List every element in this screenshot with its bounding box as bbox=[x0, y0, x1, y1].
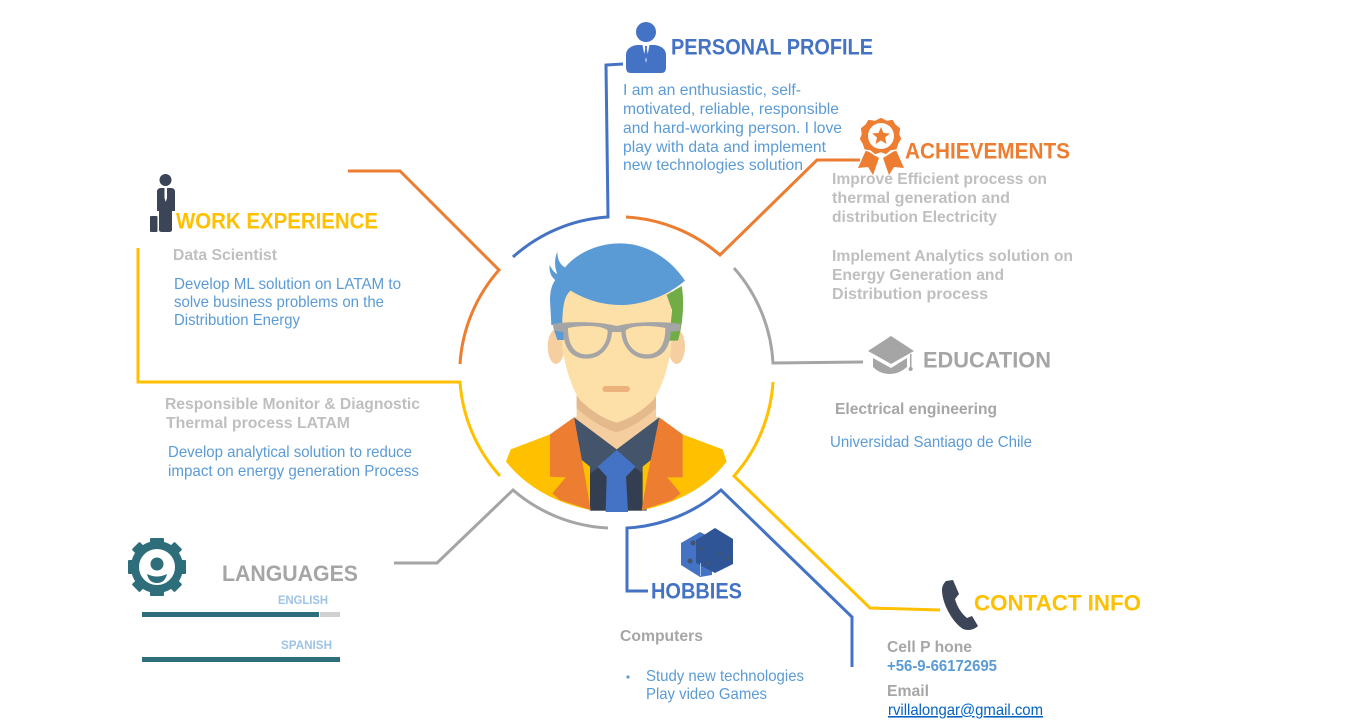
panel: contact info bbox=[887, 580, 1141, 719]
bar: spanish level bbox=[142, 657, 340, 662]
heading: languages: LANGUAGES bbox=[222, 561, 358, 586]
text: job title thermal process: Responsible Monitor & Diagnostic bbox=[165, 396, 420, 413]
text: achievements list: distribution Electricity bbox=[832, 209, 997, 226]
list: hobbies: Play video Games bbox=[646, 686, 767, 703]
text: profile summary: and hard-working person. I love bbox=[623, 120, 842, 137]
text: thermal process description: impact on energy generation Process bbox=[168, 463, 419, 480]
text: university: Universidad Santiago de Chile bbox=[830, 434, 1032, 451]
text: achievements list: Distribution process bbox=[832, 286, 988, 303]
label: english: ENGLISH bbox=[278, 593, 328, 607]
icon: award ribbon bbox=[858, 117, 904, 175]
icon: telephone handset bbox=[942, 580, 978, 630]
text: phone number: +56-9-66172695 bbox=[887, 658, 997, 675]
icon: graduation cap bbox=[868, 336, 914, 374]
heading: education: EDUCATION bbox=[923, 348, 1051, 372]
text: thermal process description bbox=[168, 444, 419, 480]
icon: standing businessman with suitcase bbox=[150, 174, 175, 232]
connector: work experience lower bbox=[138, 248, 500, 476]
panel: work experience bbox=[150, 174, 420, 480]
connector: work experience upper bbox=[348, 171, 499, 364]
panel: hobbies bbox=[620, 528, 804, 703]
connector: achievements bbox=[626, 160, 860, 255]
text: job title data scientist: Data Scientist bbox=[173, 247, 278, 264]
text: email label: Email bbox=[887, 683, 929, 700]
text: degree: Electrical engineering bbox=[835, 401, 997, 418]
bar: english level bbox=[142, 612, 340, 617]
connector: education bbox=[734, 268, 863, 363]
text: achievements list: Improve Efficient process on bbox=[832, 171, 1047, 188]
heading: personal profile: PERSONAL PROFILE bbox=[671, 34, 873, 60]
list: hobbies bbox=[626, 668, 804, 703]
heading: achievements: ACHIEVEMENTS bbox=[905, 138, 1070, 164]
text: profile summary: motivated, reliable, responsible bbox=[623, 101, 839, 118]
text: profile summary bbox=[623, 82, 842, 174]
panel: achievements bbox=[832, 117, 1073, 303]
text: profile summary: I am an enthusiastic, self- bbox=[623, 82, 801, 99]
heading: work experience: WORK EXPERIENCE bbox=[176, 208, 378, 234]
text: job title thermal process bbox=[165, 396, 420, 432]
text: data scientist description: Develop ML solution on LATAM to bbox=[174, 276, 401, 293]
text: achievements list bbox=[832, 171, 1073, 303]
text: data scientist description: solve business problems on the bbox=[174, 294, 384, 311]
text: data scientist description: Distribution Energy bbox=[174, 312, 300, 329]
connector: contact info bbox=[734, 382, 940, 610]
panel: languages bbox=[128, 538, 358, 662]
text: phone label: Cell P hone bbox=[887, 639, 972, 656]
heading: hobbies: HOBBIES bbox=[651, 578, 742, 604]
text: data scientist description bbox=[174, 276, 401, 329]
text: profile summary: new technologies solution bbox=[623, 157, 803, 174]
text: email address: rvillalongar@gmail.com bbox=[888, 702, 1043, 719]
heading: contact info: CONTACT INFO bbox=[974, 590, 1141, 616]
panel: personal profile bbox=[623, 22, 873, 174]
panel: education bbox=[830, 336, 1051, 451]
icon: dice bbox=[681, 528, 733, 577]
connector: personal profile bbox=[513, 64, 623, 257]
text: computers: Computers bbox=[620, 628, 703, 645]
icon: gear with person bbox=[128, 538, 186, 596]
connector: languages bbox=[394, 490, 608, 563]
text: achievements list: Energy Generation and bbox=[832, 267, 1004, 284]
text: job title thermal process: Thermal process LATAM bbox=[166, 415, 350, 432]
text: achievements list: Implement Analytics solution on bbox=[832, 248, 1073, 265]
text: achievements list: thermal generation and bbox=[832, 190, 1010, 207]
list: hobbies: Study new technologies bbox=[646, 668, 804, 685]
text: thermal process description: Develop analytical solution to reduce bbox=[168, 444, 412, 461]
connector: hobbies bbox=[627, 490, 852, 667]
central avatar bbox=[506, 243, 727, 512]
icon: businessman bust bbox=[626, 22, 666, 73]
label: spanish: SPANISH bbox=[281, 638, 332, 652]
text: profile summary: play with data and implement bbox=[623, 139, 827, 156]
